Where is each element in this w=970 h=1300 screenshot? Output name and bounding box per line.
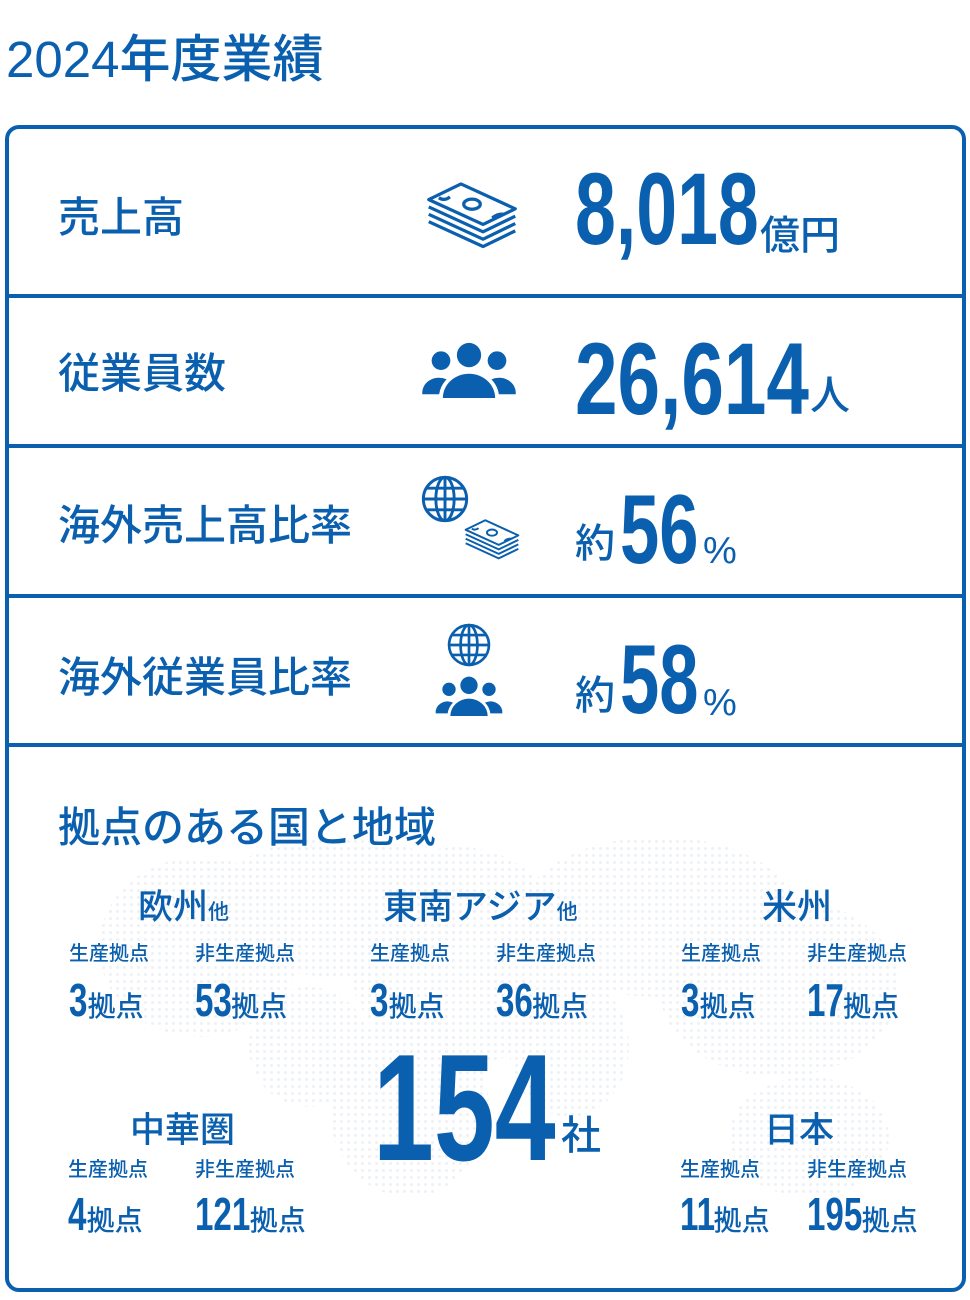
region: americas: 17 [807,974,844,1026]
label: 海外従業員比率 [58,654,352,701]
region: greater china [68,1111,306,1240]
region: europe: 非生産拠点 [195,943,295,965]
row: overseas sales ratio: % [703,530,737,572]
region: southeast asia: 36 [496,974,533,1026]
row: overseas employees ratio: 58 [620,624,698,734]
region: southeast asia [370,888,596,1026]
region: europe: 3 [69,974,87,1026]
region: americas: 非生産拠点 [807,943,907,965]
label: sales: 売上高 [58,194,184,241]
row: overseas sales ratio [58,474,737,584]
row: sales: 億円 [760,214,840,258]
label: 海外売上高比率 [58,502,352,549]
title: 2024年度業績 [6,31,323,88]
icon: globe + money [422,476,520,560]
region: southeast asia: 生産拠点 [370,943,450,965]
icon: money [427,182,517,248]
region: americas: 拠点 [700,991,756,1022]
row: sales [58,152,840,266]
region: greater china: 4 [68,1188,86,1240]
region: japan: 195 [807,1188,862,1240]
region: europe: 拠点 [88,991,144,1022]
region: europe: 53 [195,974,232,1026]
region: japan: 生産拠点 [680,1159,760,1181]
region: greater china: 121 [195,1188,250,1240]
row: overseas employees ratio: % [703,682,737,724]
heading: 拠点のある国と地域 [58,804,436,851]
row: overseas employees ratio [58,624,737,734]
region: greater china: 中華圏 [130,1111,235,1150]
region: southeast asia: 非生産拠点 [496,943,596,965]
value: employees: 26,614 [575,322,809,436]
region: japan: 非生産拠点 [807,1159,907,1181]
region: greater china: 拠点 [87,1205,143,1236]
region: americas: 拠点 [843,991,899,1022]
region: southeast asia: 3 [370,974,388,1026]
value: sales: 8,018 [575,152,759,266]
region: americas [681,888,907,1026]
total count: 154 [373,1023,556,1193]
region: americas: 生産拠点 [681,943,761,965]
region: japan: 拠点 [714,1205,770,1236]
region: europe [69,888,295,1026]
region: japan: 11 [680,1188,715,1240]
region: greater china: 非生産拠点 [195,1159,295,1181]
row: employees: 人 [810,374,850,418]
region: japan: 日本 [764,1111,834,1150]
region: europe: 生産拠点 [69,943,149,965]
region: greater china: 生産拠点 [68,1159,148,1181]
region: japan: 拠点 [862,1205,918,1236]
region: southeast asia: 拠点 [389,991,445,1022]
icon: globe + people [436,624,502,716]
total count: 社 [561,1114,601,1158]
map background [102,840,896,1193]
region: southeast asia: 東南アジア他 [383,888,578,927]
row: employees [58,322,850,436]
region: europe: 拠点 [231,991,287,1022]
icon: people [422,342,516,398]
region: americas: 米州 [762,888,832,927]
label: employees: 従業員数 [58,350,226,397]
value: 約 [575,522,615,566]
row: overseas sales ratio: 56 [620,474,698,584]
region: japan [680,1111,918,1240]
panel: locations [58,804,918,1240]
region: greater china: 拠点 [250,1205,306,1236]
region: americas: 3 [681,974,699,1026]
region: europe: 欧州他 [138,888,229,927]
value: 約 [575,674,615,718]
region: southeast asia: 拠点 [532,991,588,1022]
